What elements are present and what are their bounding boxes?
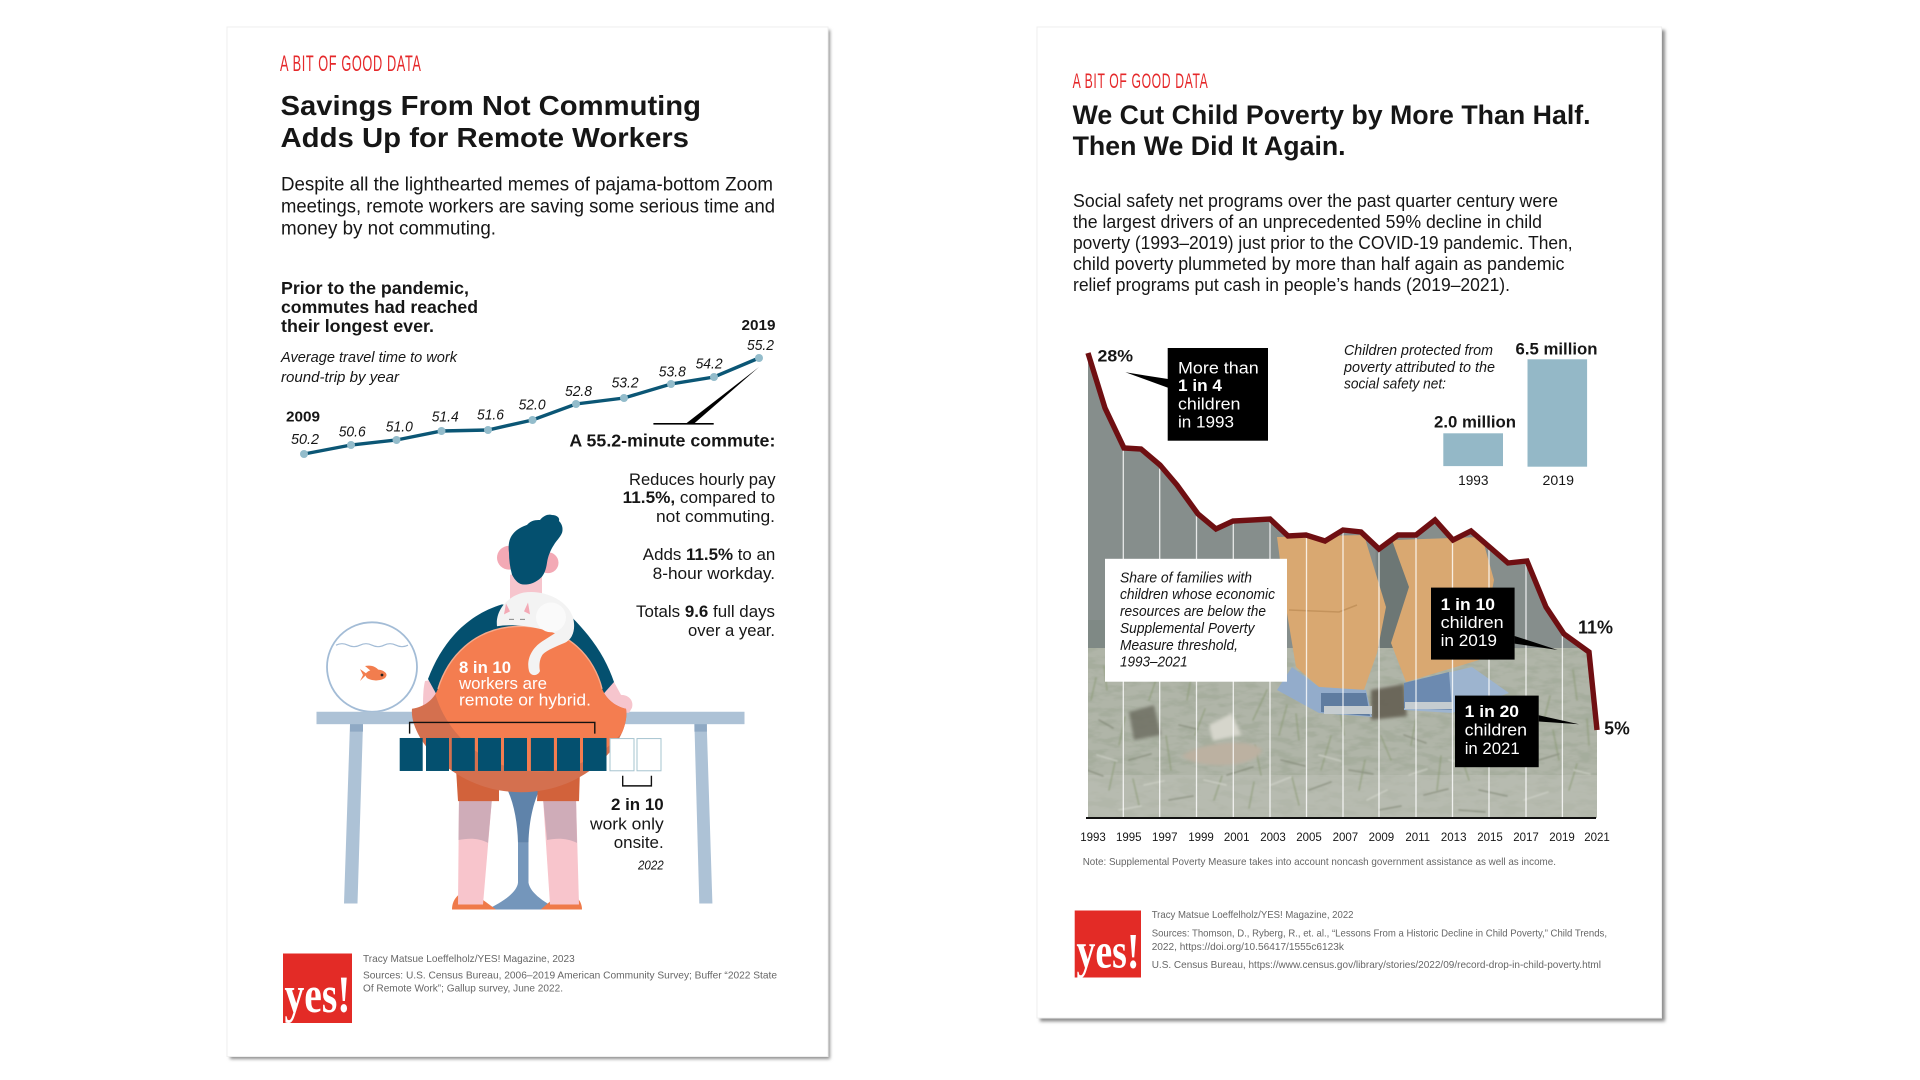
logo: yes: yes! bbox=[284, 967, 350, 1024]
line chart: commute time: 51.0 bbox=[386, 419, 413, 436]
commute effects text bbox=[569, 431, 776, 640]
commute effects text: 8-hour workday. bbox=[653, 564, 775, 583]
kicker: A BIT OF GOOD DATA bbox=[1073, 68, 1208, 93]
callout: more than 1 in 4 bbox=[1125, 348, 1268, 441]
chart heading bbox=[281, 278, 478, 336]
line chart: commute time: 54.2 bbox=[696, 355, 723, 372]
logo: yes bbox=[283, 954, 352, 1024]
intro text: Despite all the lighthearted memes of pajama-bottom Zoom bbox=[281, 174, 773, 196]
line chart: commute time: 53.8 bbox=[659, 364, 686, 381]
chart heading: their longest ever. bbox=[281, 316, 434, 336]
callout: more than 1 in 4: 1 in 4 bbox=[1178, 376, 1223, 395]
shorts bbox=[456, 768, 580, 801]
credits: Sources: Thomson, D., Ryberg, R., et. al., “Lessons From a Historic Decline in Child Poverty,” Child Trends, bbox=[1152, 928, 1607, 940]
credits bbox=[363, 953, 777, 995]
chart description box: children whose economic bbox=[1120, 586, 1275, 603]
axis years: 2001 bbox=[1224, 832, 1249, 844]
axis years: 2007 bbox=[1333, 832, 1358, 844]
line chart: commute time: 50.2 bbox=[291, 431, 320, 448]
intro text: the largest drivers of an unprecedented 59% decline in child bbox=[1073, 212, 1542, 232]
callout: more than 1 in 4: More than bbox=[1178, 358, 1259, 377]
line chart: commute time: 53.2 bbox=[612, 375, 639, 392]
credits bbox=[1152, 909, 1607, 971]
text: 8 in 10 remote or hybrid: workers are bbox=[458, 674, 547, 693]
heading: Adds Up for Remote Workers bbox=[280, 122, 689, 153]
area chart with photo fill bbox=[1084, 350, 1604, 820]
line chart: commute time: 51.4 bbox=[432, 409, 459, 426]
callout: 1 in 10: children bbox=[1441, 613, 1504, 632]
axis years: 2005 bbox=[1296, 832, 1322, 844]
text: 2 in 10 work only onsite: onsite. bbox=[614, 833, 664, 852]
text: 2 in 10 work only onsite: 2 in 10 bbox=[611, 795, 664, 814]
axis years: 1995 bbox=[1116, 832, 1142, 844]
commute effects text: not commuting. bbox=[656, 507, 775, 526]
commute effects text: 11.5%, compared to bbox=[623, 488, 775, 507]
axis years: 1999 bbox=[1188, 832, 1214, 844]
axis years: 1993 bbox=[1080, 832, 1106, 844]
axis years: 2021 bbox=[1584, 832, 1610, 844]
illustration: person at desk bbox=[316, 515, 744, 909]
credits: Tracy Matsue Loeffelholz/YES! Magazine, 2022 bbox=[1152, 909, 1354, 921]
credits: Of Remote Work”; Gallup survey, June 2022. bbox=[363, 983, 563, 995]
credits: 2022, https://doi.org/10.56417/1555c6123k bbox=[1152, 941, 1345, 953]
axis years bbox=[1080, 832, 1610, 844]
cat bbox=[497, 592, 574, 675]
callout pointer bbox=[653, 367, 759, 425]
chart description box: Supplemental Poverty bbox=[1120, 620, 1256, 637]
callout: 1 in 20: in 2021 bbox=[1465, 739, 1520, 758]
axis years: 2013 bbox=[1441, 832, 1466, 844]
callout: 1 in 10: 1 in 10 bbox=[1441, 595, 1495, 614]
legs bbox=[458, 798, 579, 905]
credits: Tracy Matsue Loeffelholz/YES! Magazine, 2023 bbox=[363, 953, 575, 965]
bar chart: children protected: 1993 bbox=[1458, 472, 1489, 488]
chart description box: Measure threshold, bbox=[1120, 637, 1238, 654]
stool bbox=[487, 783, 559, 909]
heading bbox=[280, 90, 701, 153]
heading bbox=[1073, 100, 1591, 161]
chart description box bbox=[1105, 559, 1287, 682]
bar chart: children protected: 6.5 million bbox=[1516, 340, 1598, 358]
intro text bbox=[281, 174, 775, 240]
line chart: commute time bbox=[286, 317, 776, 458]
commute effects text: Adds 11.5% to an bbox=[643, 545, 775, 564]
axis years: 2011 bbox=[1405, 832, 1430, 844]
line chart: commute time: 50.6 bbox=[339, 424, 366, 441]
intro text: Social safety net programs over the past quarter century were bbox=[1073, 191, 1558, 211]
logo: yes: yes! bbox=[1076, 922, 1140, 978]
callout: 1 in 10: in 2019 bbox=[1441, 631, 1497, 650]
hair bbox=[509, 515, 563, 585]
heading: Savings From Not Commuting bbox=[280, 90, 701, 121]
commute effects text: Reduces hourly pay bbox=[629, 470, 776, 489]
gridlines bbox=[1122, 450, 1564, 817]
bar chart: children protected: 2.0 million bbox=[1434, 413, 1516, 431]
axis years: 2015 bbox=[1477, 832, 1503, 844]
chart description box: resources are below the bbox=[1120, 603, 1266, 620]
intro text: poverty (1993–2019) just prior to the COVID-19 pandemic. Then, bbox=[1073, 233, 1573, 253]
intro text: relief programs put cash in people’s hands (2019–2021). bbox=[1073, 275, 1510, 295]
bracket: 8 in 10 bbox=[410, 722, 595, 734]
note: Note: Supplemental Poverty Measure takes into account noncash government assistance as well as income. bbox=[1083, 857, 1556, 868]
poverty line bbox=[1088, 353, 1597, 730]
commute effects text: A 55.2-minute commute: bbox=[569, 431, 775, 451]
commute effects text: over a year. bbox=[688, 621, 775, 640]
chart description box: Share of families with bbox=[1120, 570, 1252, 586]
shoes bbox=[452, 890, 582, 909]
callout: more than 1 in 4: children bbox=[1178, 394, 1240, 413]
intro text: child poverty plummeted by more than half again as pandemic bbox=[1073, 254, 1564, 274]
axis years: 2009 bbox=[1369, 832, 1394, 844]
axis years: 2003 bbox=[1260, 832, 1286, 844]
text: 2 in 10 work only onsite: 2022 bbox=[637, 858, 664, 873]
bar chart caption: Children protected from bbox=[1344, 342, 1493, 359]
table bbox=[316, 712, 744, 904]
credits: U.S. Census Bureau, https://www.census.gov/library/stories/2022/09/record-drop-in-child-poverty.html bbox=[1152, 959, 1601, 971]
grass blades bbox=[1087, 666, 1590, 812]
shirt back bbox=[412, 626, 626, 792]
line chart: commute time: 2009 bbox=[286, 409, 320, 426]
text: 2 in 10 work only onsite: work only bbox=[589, 814, 664, 833]
photo: child's legs on grass bbox=[1084, 350, 1604, 820]
logo: yes bbox=[1075, 910, 1141, 978]
chart heading: commutes had reached bbox=[281, 297, 478, 317]
text: 8 in 10 remote or hybrid: remote or hybrid. bbox=[459, 691, 591, 709]
bar chart: children protected: 2019 bbox=[1542, 472, 1574, 488]
callout: 1 in 20 bbox=[1455, 696, 1579, 767]
panel: child poverty card bbox=[1037, 27, 1665, 1022]
credits: Sources: U.S. Census Bureau, 2006–2019 American Community Survey; Buffer “2022 State bbox=[363, 970, 777, 982]
heading: We Cut Child Poverty by More Than Half. bbox=[1073, 100, 1591, 130]
intro text bbox=[1073, 191, 1573, 295]
bar chart caption bbox=[1343, 342, 1495, 393]
bar chart caption: social safety net: bbox=[1344, 376, 1446, 393]
callout: more than 1 in 4: in 1993 bbox=[1178, 412, 1234, 431]
axis years: 2019 bbox=[1549, 832, 1575, 844]
text: 8 in 10 remote or hybrid bbox=[458, 658, 591, 709]
arms bbox=[423, 604, 632, 713]
callout: 1 in 20: children bbox=[1465, 720, 1527, 740]
line chart: commute time: 2019 bbox=[742, 317, 776, 334]
chart subtitle bbox=[280, 349, 458, 386]
intro text: money by not commuting. bbox=[281, 218, 496, 240]
line chart: commute time: 51.6 bbox=[477, 406, 505, 423]
label: 5%: 5% bbox=[1604, 718, 1630, 738]
commute effects text: Totals 9.6 full days bbox=[636, 602, 775, 621]
axis bbox=[1086, 817, 1596, 819]
text: 8 in 10 remote or hybrid: 8 in 10 bbox=[459, 658, 511, 677]
neck and ears bbox=[497, 546, 558, 604]
label: 11%: 11% bbox=[1578, 618, 1613, 638]
callout: 1 in 20: 1 in 20 bbox=[1465, 702, 1519, 721]
axis years: 1997 bbox=[1152, 832, 1178, 844]
kicker: A BIT OF GOOD DATA bbox=[280, 51, 421, 76]
chart description box: 1993–2021 bbox=[1120, 654, 1188, 670]
chart subtitle: round-trip by year bbox=[281, 369, 400, 386]
heading: Then We Did It Again. bbox=[1073, 131, 1346, 161]
callout: 1 in 10 bbox=[1431, 588, 1558, 660]
squares: 8 filled, 2 outline bbox=[400, 738, 661, 771]
bar chart: children protected bbox=[1434, 340, 1598, 488]
text: 2 in 10 work only onsite bbox=[589, 795, 664, 873]
axis years: 2017 bbox=[1513, 832, 1539, 844]
line chart: commute time: 52.8 bbox=[565, 383, 593, 400]
chart heading: Prior to the pandemic, bbox=[281, 278, 469, 298]
chart subtitle: Average travel time to work bbox=[280, 349, 458, 366]
panel: commuting card bbox=[227, 27, 830, 1059]
line chart: commute time: 52.0 bbox=[519, 396, 546, 413]
intro text: meetings, remote workers are saving some serious time and bbox=[281, 196, 775, 218]
line chart: commute time: 55.2 bbox=[747, 337, 775, 354]
icon: fishbowl bbox=[327, 622, 417, 712]
bracket: 2 in 10 bbox=[623, 776, 651, 786]
bar chart caption: poverty attributed to the bbox=[1343, 359, 1495, 376]
label: 28%: 28% bbox=[1098, 347, 1133, 366]
